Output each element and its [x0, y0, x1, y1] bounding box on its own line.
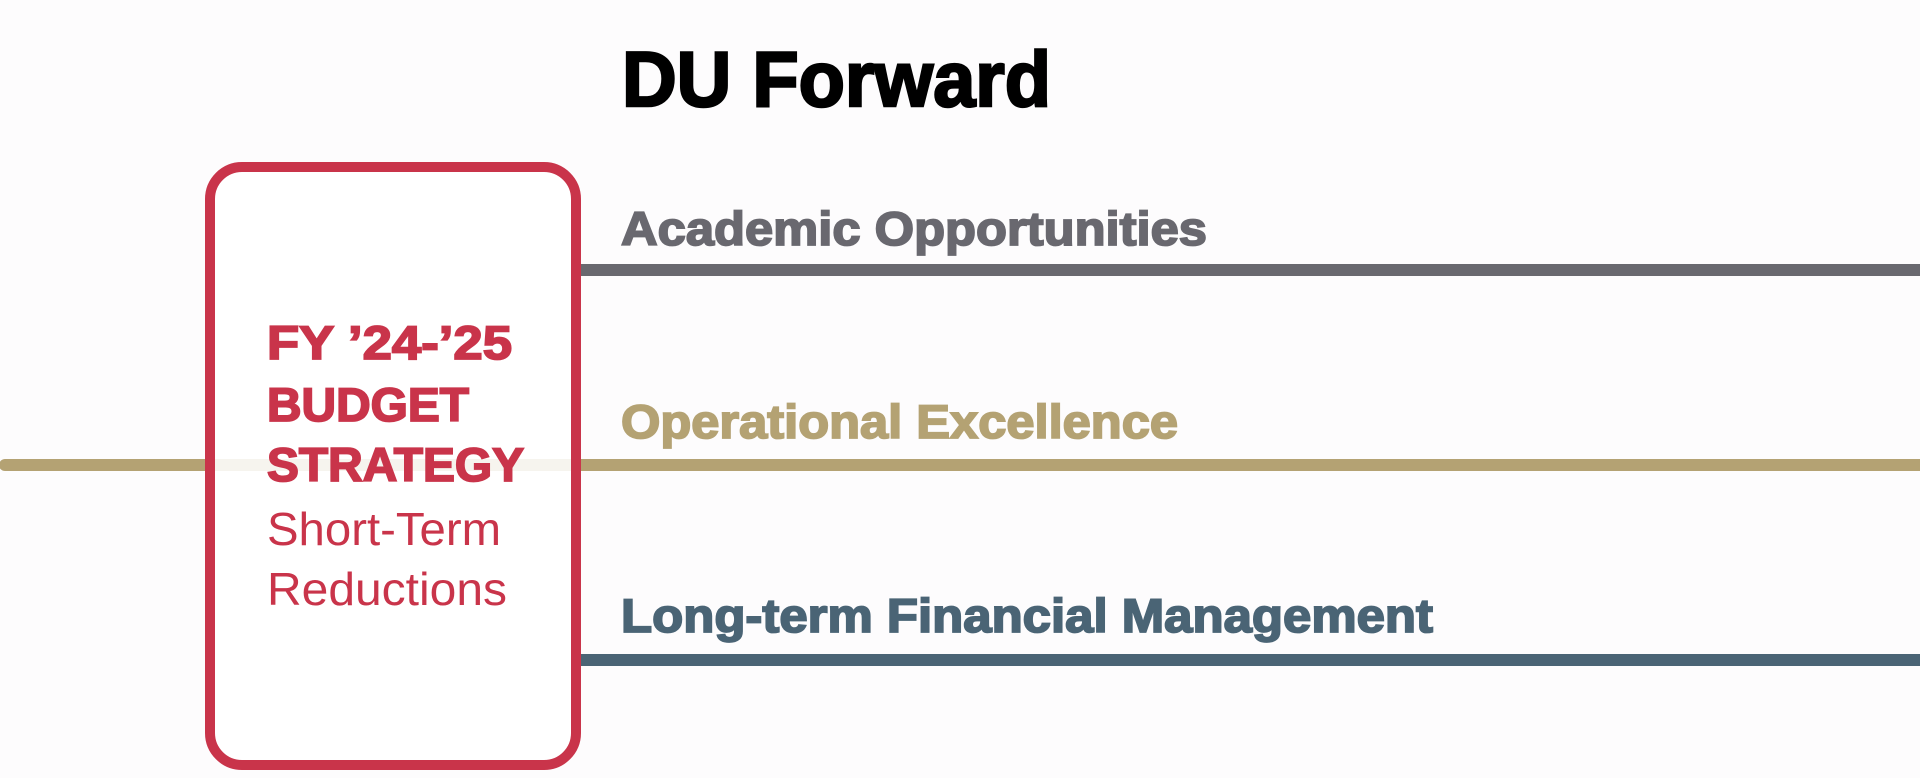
box subtext: Short-Term: [267, 503, 501, 555]
line: operational excellence: [5, 459, 1920, 471]
panel: budget strategy box: [210, 167, 576, 765]
line: academic opportunities: [575, 264, 1920, 276]
label: operational excellence: Operational Excellence: [621, 395, 1178, 448]
box heading: [267, 316, 524, 491]
label: long-term financial management: Long-term Financial Management: [621, 589, 1433, 642]
box heading: FY ’24-’25: [267, 316, 512, 369]
box subtext: Reductions: [267, 563, 507, 615]
label: academic opportunities: Academic Opportunities: [621, 202, 1207, 255]
box subtext: [267, 503, 507, 615]
box heading: STRATEGY: [267, 438, 524, 491]
line: long-term financial management: [575, 654, 1920, 666]
title: DU Forward: [622, 35, 1051, 123]
box heading: BUDGET: [267, 378, 469, 431]
